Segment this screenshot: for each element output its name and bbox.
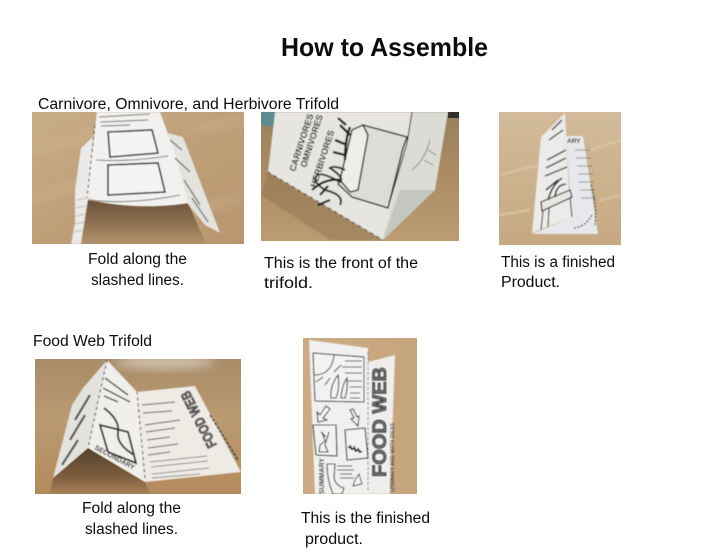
photo: front of the trifold: HERBIVORES bbox=[308, 129, 336, 189]
caption: this is the finished product bbox=[301, 510, 430, 548]
heading: Food Web Trifold: Food Web Trifold bbox=[33, 333, 152, 350]
caption: fold along the slashed lines: slashed lines. bbox=[91, 272, 184, 289]
photo: front of the trifold bbox=[261, 112, 459, 241]
caption: this is a finished product bbox=[501, 254, 615, 291]
caption: this is the finished product: This is the finished bbox=[301, 510, 430, 527]
photo: front of the trifold: OMNIVORES bbox=[298, 113, 325, 169]
caption: this is the front of the trifold bbox=[264, 255, 418, 292]
photo: front of the trifold: CARNIVORES bbox=[287, 112, 315, 173]
photo: food web trifold folded along slashed lines bbox=[35, 355, 241, 494]
caption: this is a finished product: Product. bbox=[501, 274, 560, 291]
caption: fold along the slashed lines: slashed lines. bbox=[85, 521, 178, 538]
caption: this is a finished product: This is a finished bbox=[501, 254, 615, 271]
photo: food web trifold folded along slashed lines: FOOD WEB bbox=[177, 388, 220, 451]
caption: this is the finished product: product. bbox=[305, 531, 363, 548]
caption: fold along the slashed lines: Fold along the bbox=[88, 251, 187, 268]
photo: finished food web trifold: FOOD WEB bbox=[370, 367, 391, 477]
caption: fold along the slashed lines: Fold along the bbox=[82, 500, 181, 517]
photo: finished carnivore trifold bbox=[499, 112, 621, 245]
caption: fold along the slashed lines bbox=[88, 251, 187, 289]
photo: food web trifold folded along slashed lines: SECONDARY bbox=[93, 445, 136, 472]
caption: fold along the slashed lines bbox=[82, 500, 181, 538]
title: How to Assemble bbox=[281, 32, 488, 62]
caption: this is the front of the trifold: trifold. bbox=[264, 275, 313, 292]
heading: Carnivore, Omnivore, and Herbivore Trifold: Carnivore, Omnivore, and Herbivore Trifold bbox=[38, 96, 339, 113]
photo: finished food web trifold: LITERACY AND MATH IDEAS bbox=[390, 422, 396, 492]
photo: finished food web trifold bbox=[303, 338, 417, 494]
photo: finished carnivore trifold: ARY bbox=[567, 138, 581, 145]
photo: trifold folded along slashed lines, open view bbox=[32, 112, 244, 244]
caption: this is the front of the trifold: This is the front of the bbox=[264, 255, 418, 272]
photo: finished food web trifold: SUMMARY bbox=[319, 458, 326, 494]
